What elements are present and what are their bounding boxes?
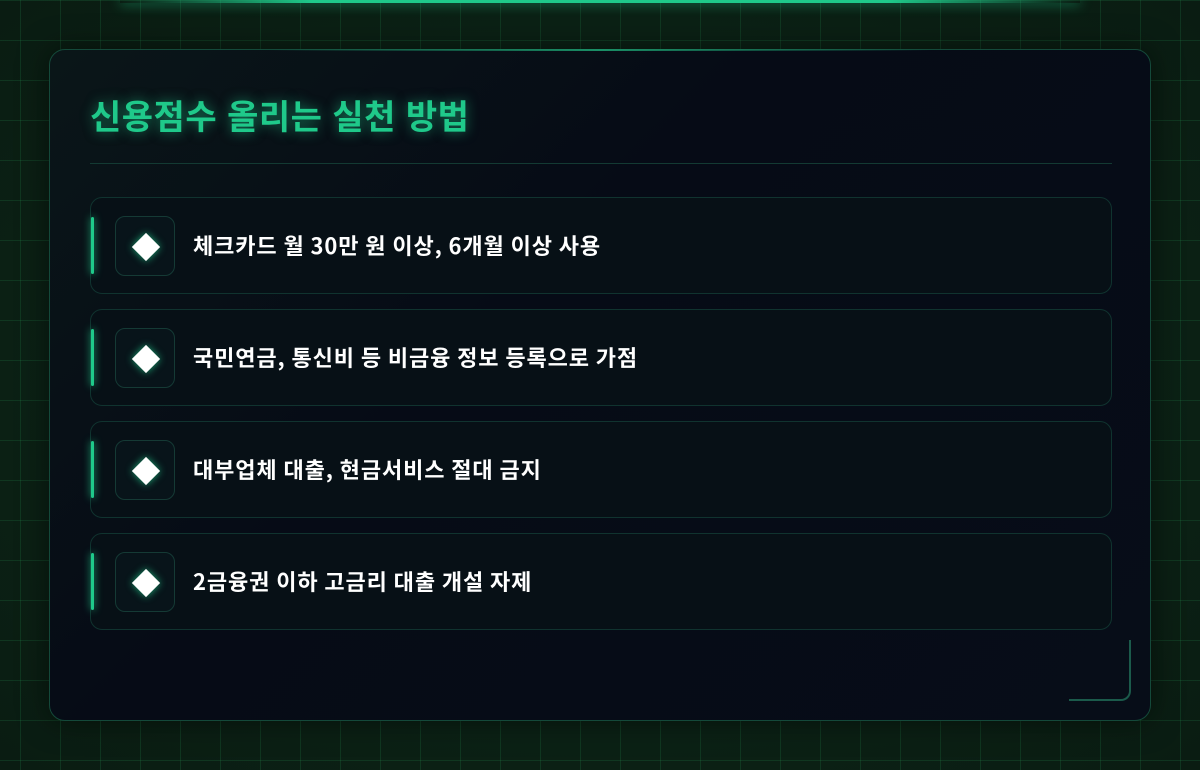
title: 신용점수 올리는 실천 방법 bbox=[90, 99, 469, 137]
item 2 bbox=[90, 309, 1112, 406]
text: item 1: 체크카드 월 30만 원 이상, 6개월 이상 사용 bbox=[193, 229, 601, 261]
text: item 4: 2금융권 이하 고금리 대출 개설 자제 bbox=[193, 565, 532, 597]
text: item 2: 국민연금, 통신비 등 비금융 정보 등록으로 가점 bbox=[193, 341, 638, 373]
item 3 bbox=[90, 421, 1112, 518]
icon: diamond bbox=[115, 440, 175, 500]
item 1 bbox=[90, 197, 1112, 294]
text: item 3: 대부업체 대출, 현금서비스 절대 금지 bbox=[193, 453, 542, 485]
icon: diamond bbox=[115, 328, 175, 388]
item 4 bbox=[90, 533, 1112, 630]
icon: diamond bbox=[115, 552, 175, 612]
corner bracket decoration bbox=[1069, 640, 1131, 701]
icon: diamond bbox=[115, 216, 175, 276]
